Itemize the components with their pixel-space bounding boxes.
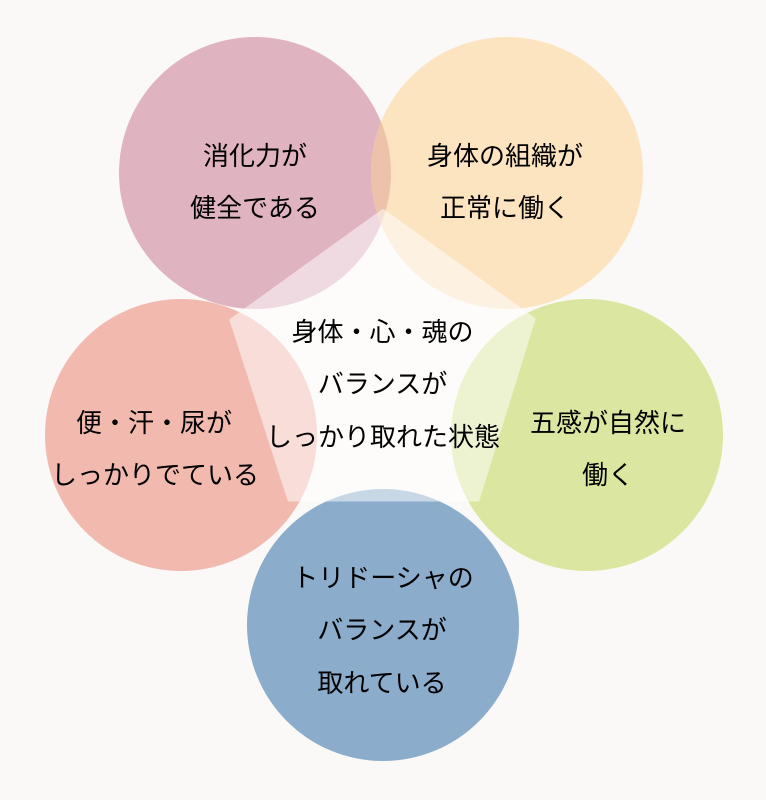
text: body tissue: 身体の組織が [427,141,583,171]
text: five senses [530,408,686,490]
text: excretion [51,408,259,490]
text: tridosha: 取れている [317,668,447,698]
text: center heading [266,317,500,452]
text: tridosha: バランスが [317,615,447,645]
text: excretion: しっかりでている [51,460,259,490]
text: center heading: 身体・心・魂の [291,317,474,347]
text: excretion: 便・汗・尿が [76,408,232,438]
text: five senses: 五感が自然に [530,408,686,438]
text: tridosha [292,563,474,698]
text: body tissue [427,141,583,223]
text: tridosha: トリドーシャの [292,563,474,593]
circle: excretion (salmon) [45,299,317,571]
text: body tissue: 正常に働く [440,193,570,223]
circle: body tissue (peach) [371,37,643,309]
text: five senses: 働く [582,460,634,490]
circle overlap: pink and peach [371,122,391,224]
circle: tridosha (blue) [247,489,519,761]
text: digestion [190,141,320,223]
text: center heading: しっかり取れた状態 [266,422,500,452]
text: digestion: 消化力が [203,141,307,171]
text: digestion: 健全である [190,193,320,223]
circle: digestion (pink) [119,37,391,309]
circle: five senses (green) [451,299,723,571]
central pentagon [231,210,534,500]
text: center heading: バランスが [318,369,447,399]
